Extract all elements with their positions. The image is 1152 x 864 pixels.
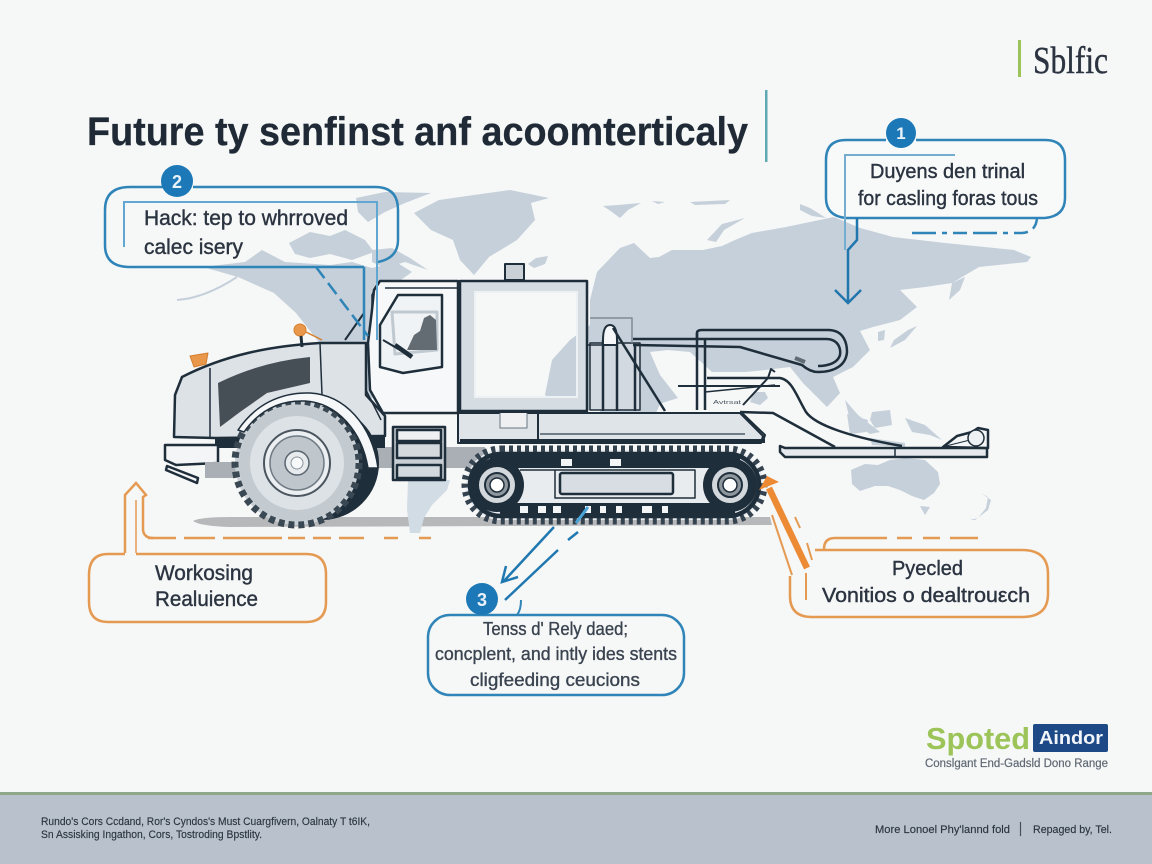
truck: cab window with driver <box>380 295 442 373</box>
callout 2 <box>105 165 398 340</box>
brand logo bottom right: Conslgant End-Gadsld Dono Range <box>925 758 1108 770</box>
truck: front wheel <box>235 401 359 525</box>
title: Future ty senfinst anf acoomterticaly <box>87 110 749 154</box>
map: Arctic islands <box>289 192 431 270</box>
callout 1 text <box>858 161 1038 210</box>
callout 2 number badge <box>161 165 193 197</box>
map: arctic dots <box>800 204 826 218</box>
callout 1 number badge: 1 <box>896 124 906 143</box>
truck: lower drill bar <box>780 428 988 457</box>
map: Aleutian coast <box>177 277 237 300</box>
callout 2 text: Hack: tep to whrroved <box>144 207 348 230</box>
map: Australia <box>851 458 940 515</box>
footer right text: More Lonoel Phy'lannd fold <box>875 824 1010 836</box>
truck: rear equipment box with window <box>460 281 587 411</box>
callout 3 text: concplent, and intly ides stents <box>435 644 677 664</box>
right orange dashed top line <box>824 538 978 549</box>
truck: rear tyre shadow <box>265 406 379 520</box>
right orange thick arrow <box>759 476 812 600</box>
left orange up arrow <box>125 483 153 553</box>
callout 2 text <box>144 207 348 259</box>
truck: mast columns <box>587 318 665 411</box>
callout 2 dashed pointer <box>316 267 368 336</box>
callout 3 number badge <box>466 583 498 615</box>
brand logo bottom right <box>925 721 1108 770</box>
callout 3 text <box>435 619 677 690</box>
right orange text: Pyecled <box>892 558 963 580</box>
map: South America <box>407 480 450 533</box>
map: Greenland <box>414 190 549 275</box>
callout 3 text: Tenss d' Rely daed; <box>483 619 628 639</box>
footer left text <box>41 816 370 841</box>
map: North America <box>203 250 412 400</box>
truck: crawler track <box>466 450 763 520</box>
title accent rule <box>765 90 768 162</box>
callout 3 <box>428 507 684 695</box>
right orange text: Vonitios o dealtrouεch <box>822 585 1030 607</box>
truck: front bumper <box>165 445 245 483</box>
truck: wheel arch fender <box>238 393 378 468</box>
map: Eurasia and North Africa <box>545 217 1031 410</box>
footer left text: Sn Assisking Ingathon, Cors, Tostroding Bpstlity. <box>41 829 262 841</box>
callout 3 text: cligfeeding ceucions <box>470 670 640 690</box>
ground shadow <box>193 517 772 527</box>
callout 1 pointer arrow <box>835 218 861 303</box>
left orange dashed line <box>148 537 431 539</box>
callout 2 text: calec isery <box>144 236 243 259</box>
callout 1 text: Duyens den trinal <box>870 161 1025 183</box>
left orange text <box>155 562 258 611</box>
brand logo bottom right: Aindor <box>1039 728 1103 748</box>
map: Okhotsk island <box>949 277 965 300</box>
callout 3 pointer arrows <box>502 507 588 600</box>
truck: cab <box>345 281 458 413</box>
footer band <box>0 792 1152 864</box>
footer right text: Repaged by, Tel. <box>1033 824 1112 836</box>
truck: orange beacons <box>190 324 322 367</box>
map: Southeast Asia islands <box>750 392 942 447</box>
truck: hood <box>174 343 385 438</box>
right orange text <box>822 558 1030 607</box>
map: Africa lower <box>600 400 662 436</box>
callout 1 <box>826 118 1065 303</box>
map: Japan and Korea <box>878 326 917 348</box>
left orange text: Workosing <box>155 562 253 585</box>
brand logo bottom right: Spoted <box>926 721 1030 756</box>
truck: drill arm linkage <box>678 369 902 447</box>
callout right orange <box>759 476 1048 617</box>
footer right text <box>875 822 1112 836</box>
top right logo: Sblfic <box>1033 40 1108 82</box>
truck: roof beacon <box>505 264 524 280</box>
callout 2 number badge: 2 <box>172 172 182 192</box>
callout 1 number badge <box>886 118 916 148</box>
truck: access ladder <box>393 427 445 480</box>
callout left orange <box>89 483 431 622</box>
map: Svalbard <box>603 200 730 218</box>
map: Iceland <box>528 256 548 268</box>
map: New Zealand <box>970 493 991 520</box>
left orange text: Realuience <box>155 588 258 611</box>
tracked drilling truck illustration <box>165 264 988 525</box>
truck: deck and chassis beam <box>215 413 765 468</box>
callout 3 number badge: 3 <box>477 590 487 610</box>
footer left text: Rundo's Cors Ccdand, Ror's Cyndos's Must Cuargfivern, Oalnaty T t6IK, <box>41 816 370 828</box>
truck: small equipment label: Avtrsat <box>713 400 742 406</box>
map: Novaya Zemlya <box>707 218 745 242</box>
world map background <box>177 190 1031 520</box>
truck: boom arm and hose loop <box>633 330 902 447</box>
callout 1 text: for casling foras tous <box>858 188 1038 210</box>
